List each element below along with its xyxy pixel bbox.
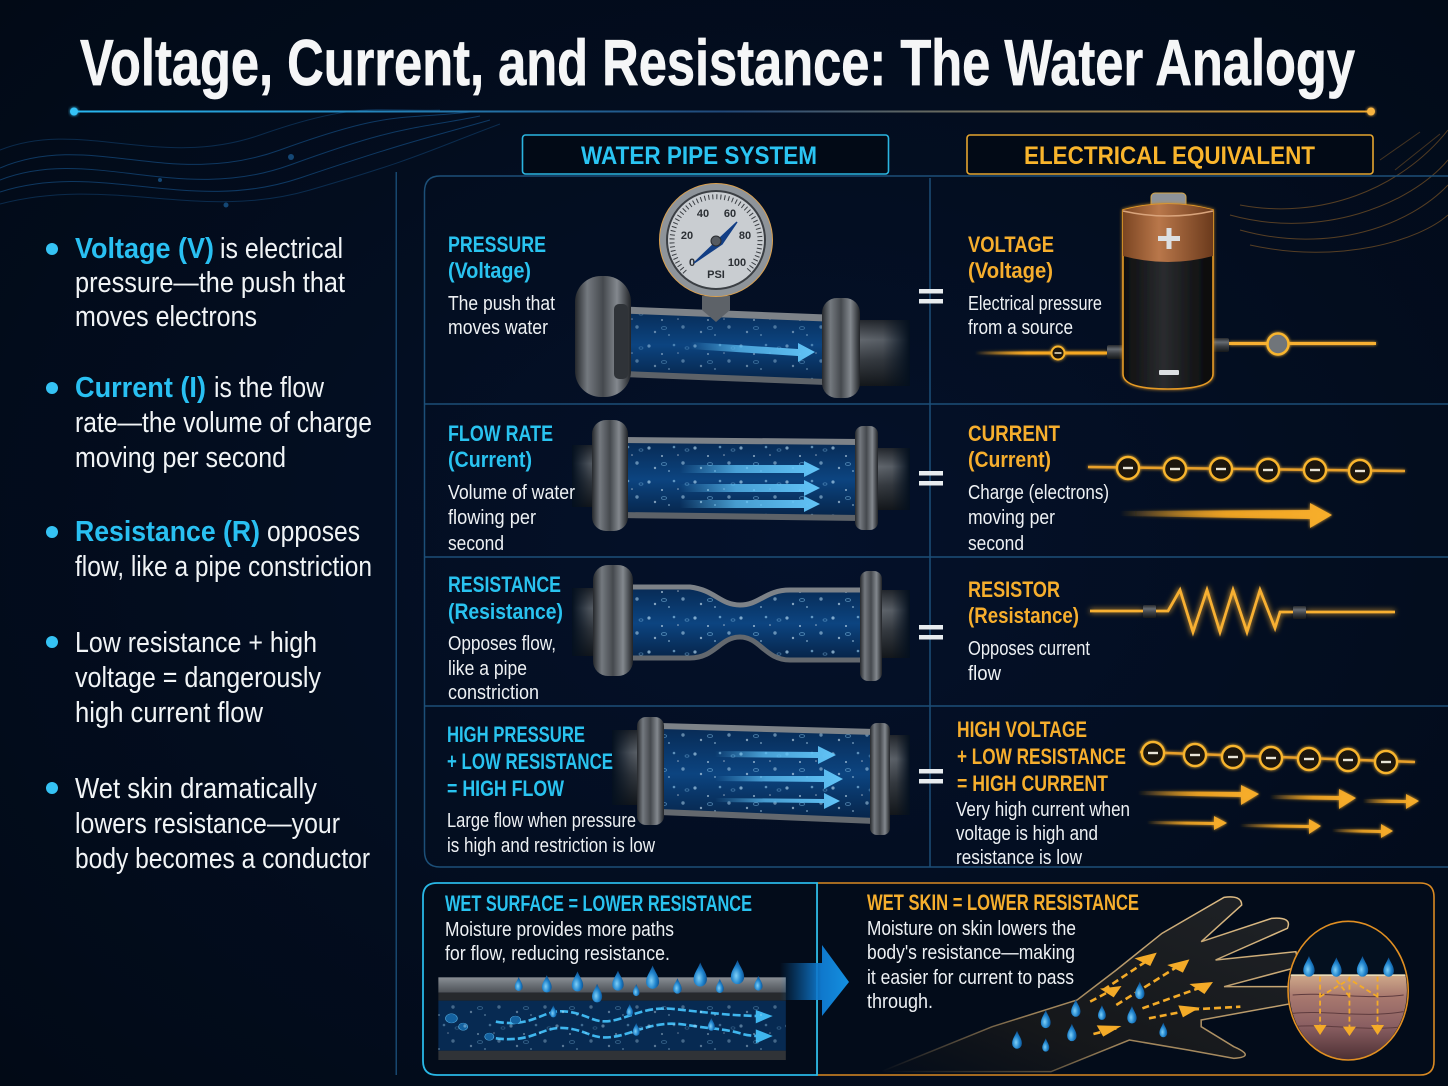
equals sign row 2: [919, 471, 943, 486]
panel: comparison table grid: [424, 176, 1448, 867]
label: high voltage: voltage is high and: [956, 823, 1098, 845]
label: wet surface: for flow, reducing resistance.: [445, 943, 670, 965]
pressure gauge: PSI: [707, 269, 725, 281]
title underline: [70, 108, 1375, 116]
label: wet skin: through.: [867, 991, 933, 1013]
pipe with arrow: [575, 276, 910, 398]
heading: electrical equivalent: [967, 135, 1373, 174]
label: high voltage: + LOW RESISTANCE: [957, 744, 1126, 769]
label: pressure: The push that: [448, 293, 555, 315]
label: resistor: RESISTOR: [968, 577, 1060, 602]
heading: water pipe system: WATER PIPE SYSTEM: [581, 142, 817, 170]
label: wet skin: Moisture on skin lowers the: [867, 918, 1076, 940]
pressure gauge: 100: [728, 257, 746, 269]
label: pressure: PRESSURE: [448, 232, 546, 257]
resistor symbol: [1090, 590, 1395, 632]
inset: skin cross-section: [1286, 921, 1410, 1060]
row: resistor, electrical side: [968, 577, 1395, 685]
panel: key points: [46, 233, 372, 875]
label: flow rate: second: [448, 533, 504, 555]
label: resistance: RESISTANCE: [448, 572, 561, 597]
arrow: wet surface to wet skin: [780, 945, 849, 1016]
label: flow rate: flowing per: [448, 507, 536, 529]
panel: wet surface, left: [423, 883, 817, 1075]
label: pressure: [448, 232, 555, 339]
wide pipe with large arrows: [612, 717, 910, 835]
left vertical divider: [396, 172, 397, 1075]
surface water drops: [446, 960, 763, 1040]
label: voltage: from a source: [968, 317, 1073, 339]
bullet: current: moving per second: [75, 442, 286, 474]
bullet: wet skin: [46, 773, 370, 875]
row: high pressure, water side: [447, 717, 910, 857]
label: current: [968, 421, 1109, 555]
row: resistance, water side: [448, 565, 910, 704]
label: flow rate: Volume of water: [448, 482, 575, 504]
heading: electrical equivalent: ELECTRICAL EQUIVALENT: [1024, 142, 1315, 170]
bullet: resistance: flow, like a pipe constriction: [75, 551, 372, 583]
label: current: Charge (electrons): [968, 482, 1109, 504]
bullet: voltage: Voltage (V): [75, 233, 214, 265]
wet metal surface with flow: [438, 960, 786, 1060]
dashed flow lines: [496, 1009, 757, 1039]
label: resistor: (Resistance): [968, 603, 1079, 628]
label: pressure: moves water: [448, 317, 548, 339]
label: voltage: Electrical pressure: [968, 293, 1102, 315]
water specks: [438, 1001, 786, 1051]
bullet: wet skin: lowers resistance—your: [75, 808, 340, 840]
pressure gauge: 80: [739, 230, 751, 242]
label: resistance: (Resistance): [448, 599, 563, 624]
label: voltage: VOLTAGE: [968, 232, 1054, 257]
pressure gauge: 60: [724, 208, 736, 220]
bullet: current: [46, 372, 372, 474]
label: resistor: [968, 577, 1090, 685]
hand illustration: [881, 897, 1410, 1072]
pressure gauge: 20: [681, 230, 693, 242]
electron chain: [1140, 742, 1415, 773]
label: flow rate: [448, 421, 575, 555]
bullet: resistance: [46, 516, 372, 583]
bullet: voltage: [46, 233, 345, 333]
label: high voltage: resistance is low: [956, 847, 1082, 869]
label: high voltage: [956, 717, 1130, 869]
bullet: low resistance: high current flow: [75, 697, 264, 729]
label: resistance: Opposes flow,: [448, 633, 556, 655]
decorative arc lines: top right: [1230, 130, 1448, 252]
label: high pressure: [447, 722, 655, 857]
bullet: current: Current (I): [75, 372, 206, 404]
row: flow rate, water side: [448, 420, 910, 555]
label: high voltage: Very high current when: [956, 799, 1130, 821]
row: pressure, water side: [448, 184, 910, 398]
label: flow rate: (Current): [448, 447, 532, 472]
label: wet surface: WET SURFACE = LOWER RESISTANCE: [445, 891, 752, 916]
label: wet skin: it easier for current to pass: [867, 967, 1074, 989]
label: resistance: constriction: [448, 682, 539, 704]
label: high pressure: + LOW RESISTANCE: [447, 749, 613, 774]
battery icon: [1107, 193, 1229, 389]
label: high voltage: = HIGH CURRENT: [957, 771, 1108, 796]
label: wet skin: [867, 890, 1139, 1013]
bullet: current: is the flow: [214, 372, 325, 404]
bullet: low resistance: [46, 627, 321, 729]
panel: wet skin, right: [817, 883, 1434, 1075]
row: current, electrical side: [968, 421, 1405, 555]
bullet: low resistance: Low resistance + high: [75, 627, 317, 659]
bullet: low resistance: voltage = dangerously: [75, 662, 321, 694]
bullet: voltage: pressure—the push that: [75, 267, 345, 299]
wires: [975, 334, 1376, 360]
label: high pressure: = HIGH FLOW: [447, 776, 564, 801]
label: high pressure: is high and restriction is low: [447, 835, 655, 857]
bullet: current: rate—the volume of charge: [75, 407, 372, 439]
label: wet skin: body's resistance—making: [867, 942, 1075, 964]
label: high pressure: HIGH PRESSURE: [447, 722, 585, 747]
decorative wave lines: top left: [0, 110, 500, 208]
label: resistance: like a pipe: [448, 658, 527, 680]
water drops on hand: [1012, 982, 1167, 1052]
label: resistance: [448, 572, 563, 704]
pressure gauge: [660, 184, 772, 322]
heading: water pipe system: [522, 135, 888, 174]
label: current: second: [968, 533, 1024, 555]
bullet: resistance: Resistance (R): [75, 516, 260, 548]
pressure gauge: 40: [697, 208, 709, 220]
current arrow: [1120, 503, 1332, 528]
label: resistor: Opposes current: [968, 638, 1090, 660]
bullet: voltage: moves electrons: [75, 301, 257, 333]
current arrows on hand: [1090, 957, 1240, 1034]
label: resistor: flow: [968, 663, 1002, 685]
pressure gauge: 0: [689, 257, 695, 269]
label: voltage: [968, 232, 1102, 339]
row: high current, electrical side: [956, 717, 1419, 869]
electron chain: [1088, 457, 1405, 482]
row: voltage, electrical side: [968, 193, 1376, 389]
current arrows: [1138, 785, 1419, 838]
label: voltage: (Voltage): [968, 258, 1053, 283]
label: current: CURRENT: [968, 421, 1060, 446]
label: current: moving per: [968, 507, 1055, 529]
label: high pressure: Large flow when pressure: [447, 810, 636, 832]
label: wet surface: Moisture provides more paths: [445, 919, 674, 941]
label: wet skin: WET SKIN = LOWER RESISTANCE: [867, 890, 1139, 915]
label: current: (Current): [968, 447, 1051, 472]
bullet: voltage: is electrical: [220, 233, 343, 265]
equals sign row 1: [919, 289, 943, 304]
bullet: wet skin: Wet skin dramatically: [75, 773, 317, 805]
label: wet surface: [445, 891, 752, 965]
constricted pipe: [572, 565, 910, 681]
label: high voltage: HIGH VOLTAGE: [957, 717, 1087, 742]
equals sign row 3: [919, 625, 943, 640]
bullet: wet skin: body becomes a conductor: [75, 843, 370, 875]
label: flow rate: FLOW RATE: [448, 421, 553, 446]
label: pressure: (Voltage): [448, 258, 531, 283]
bullet: resistance: opposes: [267, 516, 360, 548]
equals sign row 4: [919, 769, 943, 784]
pipe with three arrows: [572, 420, 910, 531]
